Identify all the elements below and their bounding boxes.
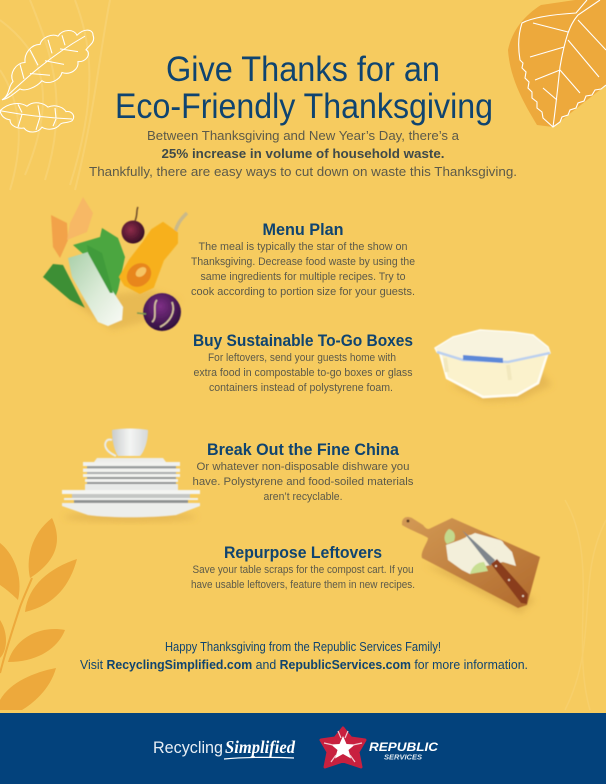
- large plates: [62, 490, 200, 517]
- logo: Republic Services: REPUBLIC: [369, 742, 439, 754]
- logo: Republic Services: SERVICES: [384, 752, 422, 762]
- icon: red star: [321, 728, 365, 767]
- section: Menu Plan: same ingredients for multiple recipes. Try to: [200, 271, 406, 283]
- section: Menu Plan: The meal is typically the star of the show on: [198, 241, 408, 253]
- icon: orange leaf backdrop: [508, 0, 606, 127]
- intro text: 25% increase in volume of household waste.: [162, 146, 445, 161]
- section: Menu Plan: Thanksgiving. Decrease food waste by using the: [191, 256, 415, 268]
- section: Repurpose Leftovers: [191, 544, 415, 591]
- squash wedges: [51, 197, 93, 258]
- title: [115, 49, 493, 126]
- section: Break Out the Fine China: Or whatever non-disposable dishware you: [196, 461, 410, 473]
- closing message: Happy Thanksgiving from the Republic Services Family!: [165, 639, 441, 654]
- section: Menu Plan: [191, 221, 415, 298]
- logo: Recycling Simplified: Simplified: [225, 737, 296, 757]
- section: Buy Sustainable To-Go Boxes: For leftovers, send your guests home with: [208, 352, 396, 364]
- section: Buy Sustainable To-Go Boxes: [193, 332, 413, 394]
- cup: [105, 428, 148, 456]
- lid seal and clips: [437, 352, 550, 362]
- section: Break Out the Fine China: have. Polystyrene and food-soiled materials: [192, 476, 414, 488]
- closing message: Visit RecyclingSimplified.com and RepublicServices.com for more information.: [80, 657, 528, 672]
- section: Repurpose Leftovers: Save your table scraps for the compost cart. If you: [192, 564, 414, 576]
- logo: Recycling Simplified: Recycling: [153, 739, 223, 757]
- shadow: [64, 512, 196, 522]
- section: Repurpose Leftovers: have usable leftovers, feature them in new recipes.: [191, 579, 415, 591]
- title: Give Thanks for an: [166, 49, 440, 89]
- butternut squash: [120, 213, 187, 293]
- chopped onion: [445, 529, 516, 574]
- background strands: top left: [0, 0, 110, 190]
- section: Buy Sustainable To-Go Boxes: containers instead of polystyrene foam.: [209, 382, 393, 394]
- title: Eco-Friendly Thanksgiving: [115, 86, 493, 126]
- icon: white outline birch leaf: [519, 0, 606, 127]
- section: Break Out the Fine China: aren’t recyclable.: [264, 491, 342, 503]
- icon: food container: [435, 330, 552, 402]
- small plates: [83, 458, 180, 490]
- closing message: [80, 639, 528, 672]
- icon: white outline oak leaves: [0, 30, 94, 132]
- logo: Recycling Simplified: [153, 737, 296, 759]
- logo: Republic Services: [321, 728, 439, 767]
- section: Buy Sustainable To-Go Boxes: extra food in compostable to-go boxes or glass: [194, 367, 412, 379]
- knife: [462, 530, 528, 604]
- intro text: Between Thanksgiving and New Year’s Day, there’s a: [147, 128, 460, 143]
- kohlrabi: [137, 293, 181, 331]
- shadow: [70, 290, 180, 330]
- board: [402, 517, 540, 608]
- body: [440, 353, 547, 397]
- footer band: [0, 713, 606, 784]
- lid: [435, 330, 550, 362]
- icon: vegetables: [43, 197, 187, 331]
- intro text: Thankfully, there are easy ways to cut down on waste this Thanksgiving.: [89, 164, 517, 179]
- shadow: [425, 565, 535, 614]
- intro text: [89, 128, 517, 179]
- icon: plates and cup: [62, 428, 200, 522]
- section: Break Out the Fine China: [192, 441, 414, 503]
- icon: cutting board: [402, 517, 540, 614]
- red onion: [122, 207, 144, 244]
- section: Break Out the Fine China: Break Out the Fine China: [207, 441, 400, 459]
- icon: orange branch bottom left: [0, 518, 77, 710]
- shadow: [450, 370, 552, 402]
- section: Menu Plan: Menu Plan: [262, 221, 344, 239]
- section: Buy Sustainable To-Go Boxes: Buy Sustainable To-Go Boxes: [193, 332, 413, 350]
- napa cabbage: [43, 228, 125, 326]
- background strands: right side: [565, 500, 606, 710]
- section: Repurpose Leftovers: Repurpose Leftovers: [224, 544, 382, 562]
- section: Menu Plan: cook according to portion size for your guests.: [191, 286, 415, 298]
